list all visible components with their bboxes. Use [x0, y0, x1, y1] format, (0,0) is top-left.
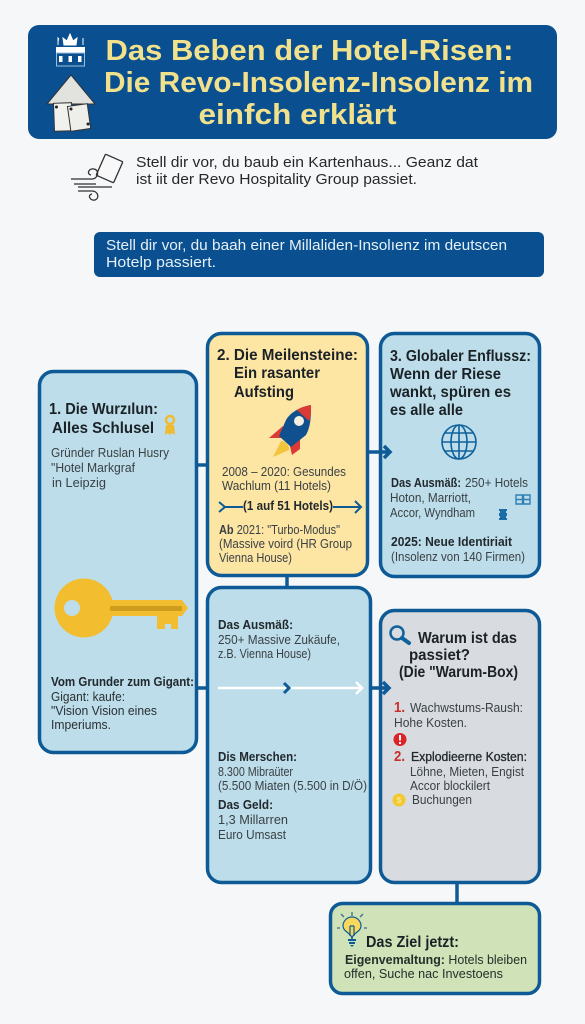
reason one: 1.: [394, 699, 405, 716]
panel: global influence: [380, 334, 540, 576]
heading: global influence: es alle alle: [390, 402, 463, 419]
reason one: Wachwstums-Raush:: [410, 701, 523, 715]
heading: global influence: [389, 348, 531, 419]
header banner: [28, 25, 557, 139]
icon: magnifier: [390, 626, 409, 643]
money block: Euro Umsast: [218, 828, 286, 842]
heading: goal: Das Ziel jetzt:: [366, 934, 459, 951]
connector: roots to scale: [198, 686, 206, 690]
intro text: ist iit der Revo Hospitality Group passiet.: [136, 171, 417, 188]
sub-banner: Stell dir vor, du baah einer Millaliden-Insolıenz im deutscen: [106, 237, 507, 254]
icon: hotel with crown: [56, 34, 85, 66]
arrow: hotel growth: (1 auf 51 Hotels): [243, 499, 333, 513]
people block: [218, 750, 367, 793]
identity text: (Insolenz von 140 Firmen): [391, 550, 525, 564]
heading: global influence: Wenn der Riese: [390, 366, 501, 383]
identity text: 2025: Neue Identiriait: [391, 535, 513, 549]
heading: global influence: 3. Globaler Enflussz:: [390, 348, 531, 365]
icon: globe: [442, 425, 476, 459]
goal text: offen, Suche nac Investoens: [344, 967, 503, 981]
vision text: Gigant: kaufe:: [51, 690, 125, 704]
panel: why box: [380, 610, 540, 882]
goal text: Eigenvemaltung: Hotels bleiben: [345, 953, 527, 967]
reason two: Explodieerne Kosten:: [411, 750, 527, 764]
icon: hotel: [499, 509, 507, 520]
heading: why: [399, 630, 518, 681]
panel: scale: [208, 588, 370, 882]
arrow: scale to why: [372, 682, 389, 694]
scale text: Accor, Wyndham: [390, 506, 475, 520]
icon: book: [516, 495, 530, 504]
scale block: [218, 618, 340, 661]
connector: roots to milestones: [198, 463, 206, 467]
timeline text: Wachlum (11 Hotels): [222, 479, 331, 493]
panel: goal: [330, 904, 540, 994]
goal text: [344, 953, 527, 981]
reason two: Löhne, Mieten, Engist: [410, 765, 524, 779]
people block: Dis Merschen:: [218, 750, 297, 764]
heading: milestones: 2. Die Meilensteine:: [217, 347, 358, 364]
reason two: 2.: [394, 748, 405, 765]
title: Die Revo-Insolenz-Insolenz im: [104, 67, 533, 99]
turbo text: [219, 523, 352, 565]
icon: card in the wind: [71, 154, 123, 200]
people block: 8.300 Mibraüter: [218, 765, 293, 779]
arrow: hotel growth: [219, 499, 361, 513]
heading: why: Warum ist das: [418, 630, 517, 647]
panel: roots: [40, 372, 196, 752]
connector: why to goal: [455, 884, 459, 902]
title: Das Beben der Hotel-Risen:: [106, 35, 514, 67]
founder text: in Leipzig: [52, 476, 106, 490]
heading: why: passiet?: [409, 647, 470, 664]
timeline text: [222, 465, 346, 493]
panel: milestones: [208, 334, 368, 576]
heading: milestones: Aufsting: [234, 384, 294, 401]
turbo text: (Massive voird (HR Group: [219, 537, 352, 551]
reason two: Buchungen: [412, 793, 472, 807]
heading: roots: [49, 401, 158, 437]
heading: milestones: [217, 347, 358, 401]
icon: large key: [54, 578, 188, 638]
heading: why: (Die "Warum-Box): [399, 664, 518, 681]
icon: warning: [394, 733, 406, 746]
turbo text: Vienna House): [219, 551, 292, 565]
scale block: z.B. Vienna House): [218, 647, 311, 661]
scale text: 250+ Hotels: [465, 476, 528, 490]
heading: global influence: wankt, spüren es: [389, 384, 511, 401]
icon: small ribbon key: [165, 416, 175, 435]
people block: (5.500 Miaten (5.500 in D/Ö): [218, 779, 367, 793]
vision text: [51, 675, 194, 732]
founder text: "Hotel Markgraf: [51, 461, 135, 475]
money block: 1,3 Millarren: [218, 813, 288, 827]
identity text: [391, 535, 525, 564]
reason one: [394, 699, 523, 730]
scale text: [390, 476, 528, 520]
vision text: Imperiums.: [51, 718, 111, 732]
heading: roots: 1. Die Wurzılun:: [49, 401, 158, 418]
icon: light bulb: [337, 912, 367, 947]
sub-banner: Hotelp passiert.: [106, 254, 216, 271]
title: [104, 35, 533, 131]
scale block: 250+ Massive Zukäufe,: [218, 633, 340, 647]
icon: rocket: [269, 405, 311, 457]
vision text: "Vision Vision eines: [51, 704, 157, 718]
arrow: white timeline: [218, 682, 362, 694]
icon: coin: $: [397, 796, 402, 805]
connector: milestones to scale: [285, 577, 289, 586]
heading: milestones: Ein rasanter: [234, 365, 320, 382]
founder text: Gründer Ruslan Husry: [51, 446, 170, 460]
scale text: Das Ausmäß:: [391, 476, 461, 490]
intro text: [136, 154, 479, 188]
vision text: Vom Grunder zum Gigant:: [51, 675, 194, 689]
timeline text: 2008 – 2020: Gesundes: [222, 465, 346, 479]
title: einfch erklärt: [198, 99, 397, 131]
heading: roots: Alles Schlusel: [52, 420, 154, 437]
reason two: [394, 748, 527, 807]
intro text: Stell dir vor, du baub ein Kartenhaus... Geanz dat: [136, 154, 479, 171]
money block: Das Geld:: [218, 798, 273, 812]
money block: [218, 798, 288, 842]
founder text: [51, 446, 170, 490]
sub-banner: [94, 232, 544, 277]
scale text: Hoton, Marriott,: [390, 491, 471, 505]
turbo text: Ab 2021: "Turbo-Modus": [219, 523, 340, 537]
arrow: milestones to global: [369, 446, 390, 458]
reason two: Accor blockilert: [410, 779, 490, 793]
icon: coin: [392, 794, 406, 806]
reason one: Hohe Kosten.: [394, 716, 467, 730]
scale block: Das Ausmäß:: [218, 618, 293, 632]
icon: house of cards: [47, 75, 95, 131]
